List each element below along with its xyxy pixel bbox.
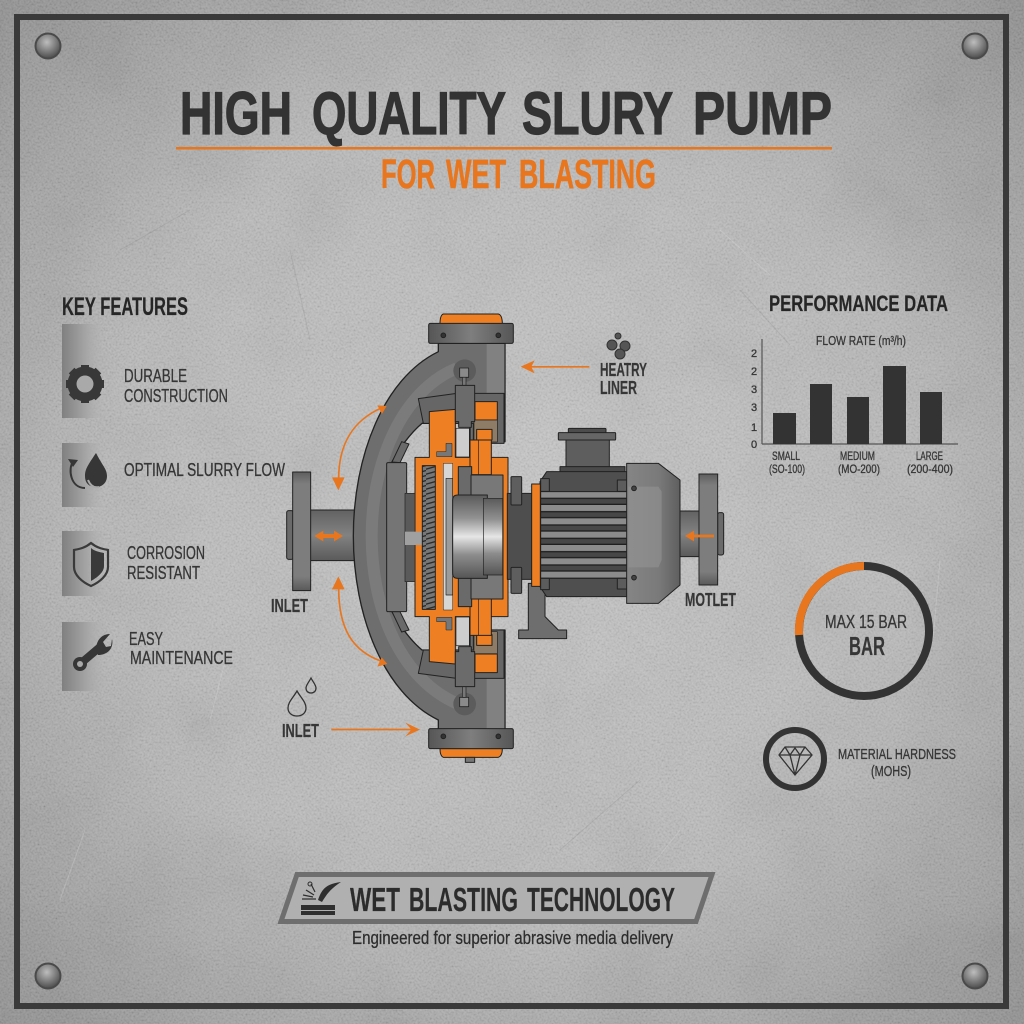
x axis labels	[769, 449, 953, 476]
feature: easy maintenance: EASY	[129, 629, 163, 649]
orange flow arrows	[314, 360, 714, 736]
orange strip	[532, 484, 540, 586]
x axis labels: SMALL	[772, 449, 800, 463]
icon: diamond	[766, 730, 824, 788]
main heading: HIGH	[180, 80, 292, 147]
main heading	[180, 80, 832, 147]
outlet pipe and flange	[680, 474, 724, 585]
icon: shield	[74, 543, 108, 586]
arrow: lower curve	[332, 576, 387, 667]
corner brackets	[541, 479, 627, 590]
feature: durable construction: DURABLE	[124, 366, 187, 386]
x axis labels: (200-400)	[907, 462, 953, 476]
subheading: BLASTING	[519, 151, 656, 197]
pressure gauge	[799, 566, 929, 696]
subheading	[381, 151, 656, 197]
arrow: inlet double	[314, 531, 343, 541]
main heading: QUALITY	[312, 80, 506, 147]
bar chart: flow rate	[751, 333, 958, 476]
material hardness: MATERIAL HARDNESS	[838, 746, 956, 763]
volute casing	[353, 343, 505, 729]
arrow: upper curve	[332, 405, 387, 490]
motor	[532, 428, 724, 603]
y axis labels: 3	[751, 402, 757, 414]
top and bottom bolts	[455, 368, 475, 707]
label: heatry liner: LINER	[600, 378, 637, 398]
y axis labels: 1	[751, 422, 757, 434]
icon: droplets	[288, 678, 316, 716]
material hardness: (MOHS)	[871, 763, 911, 780]
subheading: WET	[446, 151, 506, 197]
feature: easy maintenance	[62, 622, 233, 691]
bottom banner	[281, 874, 712, 948]
feature: corrosion resistant: CORROSION	[127, 543, 205, 563]
y axis labels: 0	[751, 439, 757, 451]
pump cutaway diagram	[287, 314, 724, 762]
feature: corrosion resistant: RESISTANT	[127, 563, 200, 583]
x axis labels: (MO-200)	[838, 462, 880, 476]
left inlet pipe and flange	[287, 472, 355, 591]
feature: durable construction	[62, 324, 228, 418]
banner title: TECHNOLOGY	[527, 881, 675, 918]
x axis labels: (SO-100)	[769, 462, 805, 476]
key features heading: KEY FEATURES	[62, 293, 188, 321]
label: motlet: MOTLET	[685, 590, 736, 610]
panel: performance data	[751, 291, 958, 788]
banner title: BLASTING	[409, 881, 518, 918]
motor body	[540, 472, 627, 597]
rivet top left	[36, 34, 60, 58]
y axis labels: 2	[751, 348, 757, 360]
arrow: bottom inlet	[331, 723, 420, 736]
label: inlet bottom with droplets: INLET	[282, 721, 319, 741]
main heading: SLURY	[522, 80, 673, 147]
top and bottom flanges	[429, 314, 513, 762]
y axis labels: 3	[751, 384, 757, 396]
cooling fins	[541, 492, 627, 578]
banner title: WET	[350, 881, 400, 918]
pressure gauge: MAX 15 BAR	[825, 612, 907, 632]
pump labels	[271, 333, 736, 741]
icon: gear	[66, 365, 104, 403]
main heading: PUMP	[693, 80, 832, 147]
panel: key features	[62, 293, 285, 691]
subheading: FOR	[381, 151, 435, 197]
end cover	[627, 463, 680, 603]
label: heatry liner	[600, 333, 647, 398]
rivet bottom right	[962, 964, 988, 988]
feature: optimal slurry flow: OPTIMAL SLURRY FLOW	[124, 460, 285, 480]
axes	[762, 339, 958, 444]
y axis labels	[751, 348, 757, 451]
performance heading: PERFORMANCE DATA	[769, 291, 948, 316]
banner title	[350, 881, 675, 918]
y axis labels: 2	[751, 366, 757, 378]
terminal box	[558, 428, 625, 472]
arrow: heavy liner	[521, 360, 589, 373]
x axis labels: LARGE	[916, 449, 943, 463]
motor foot	[519, 583, 567, 639]
banner tagline: Engineered for superior abrasive media delivery	[352, 928, 673, 948]
icon: flow arrow and drop	[68, 453, 107, 488]
material hardness	[766, 730, 956, 788]
bottom flange	[429, 729, 513, 749]
icon: wrench	[73, 634, 112, 671]
label: inlet left: INLET	[271, 596, 308, 616]
bars	[773, 366, 942, 444]
orange internal liner	[415, 402, 508, 673]
rivet top right	[962, 34, 988, 58]
feature: easy maintenance: MAINTENANCE	[130, 648, 233, 668]
x axis labels: MEDIUM	[840, 449, 875, 463]
label: inlet bottom with droplets	[282, 678, 319, 741]
chart title: FLOW RATE (m³/h)	[816, 333, 906, 348]
banner shape	[281, 874, 712, 922]
top flange	[429, 323, 513, 343]
rivet bottom left	[36, 964, 60, 988]
arrow: outlet	[685, 531, 714, 541]
impeller and shaft	[405, 466, 503, 609]
top orange cap	[440, 314, 502, 324]
title underline	[176, 147, 832, 150]
bottom orange cap	[440, 749, 502, 757]
pressure gauge: BAR	[849, 631, 885, 661]
title	[176, 80, 832, 197]
icon: abrasive particles	[607, 333, 630, 359]
icon: blasting nozzle	[301, 882, 341, 915]
feature: corrosion resistant	[62, 531, 205, 596]
motor coupling	[507, 477, 534, 593]
label: heatry liner: HEATRY	[600, 360, 647, 380]
feature: durable construction: CONSTRUCTION	[124, 386, 228, 406]
feature: optimal slurry flow	[62, 443, 285, 507]
